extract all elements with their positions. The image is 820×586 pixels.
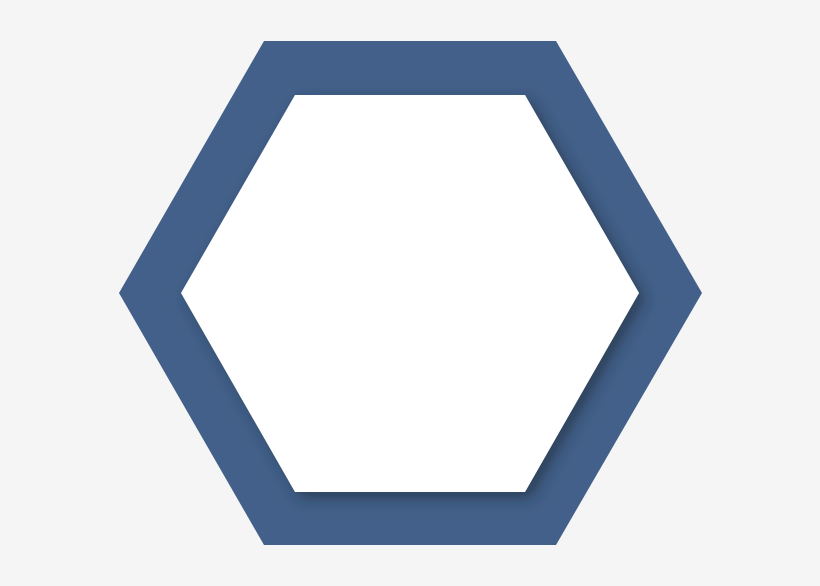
inner white hexagon: [181, 95, 639, 492]
outer blue hexagon frame: [119, 41, 702, 545]
